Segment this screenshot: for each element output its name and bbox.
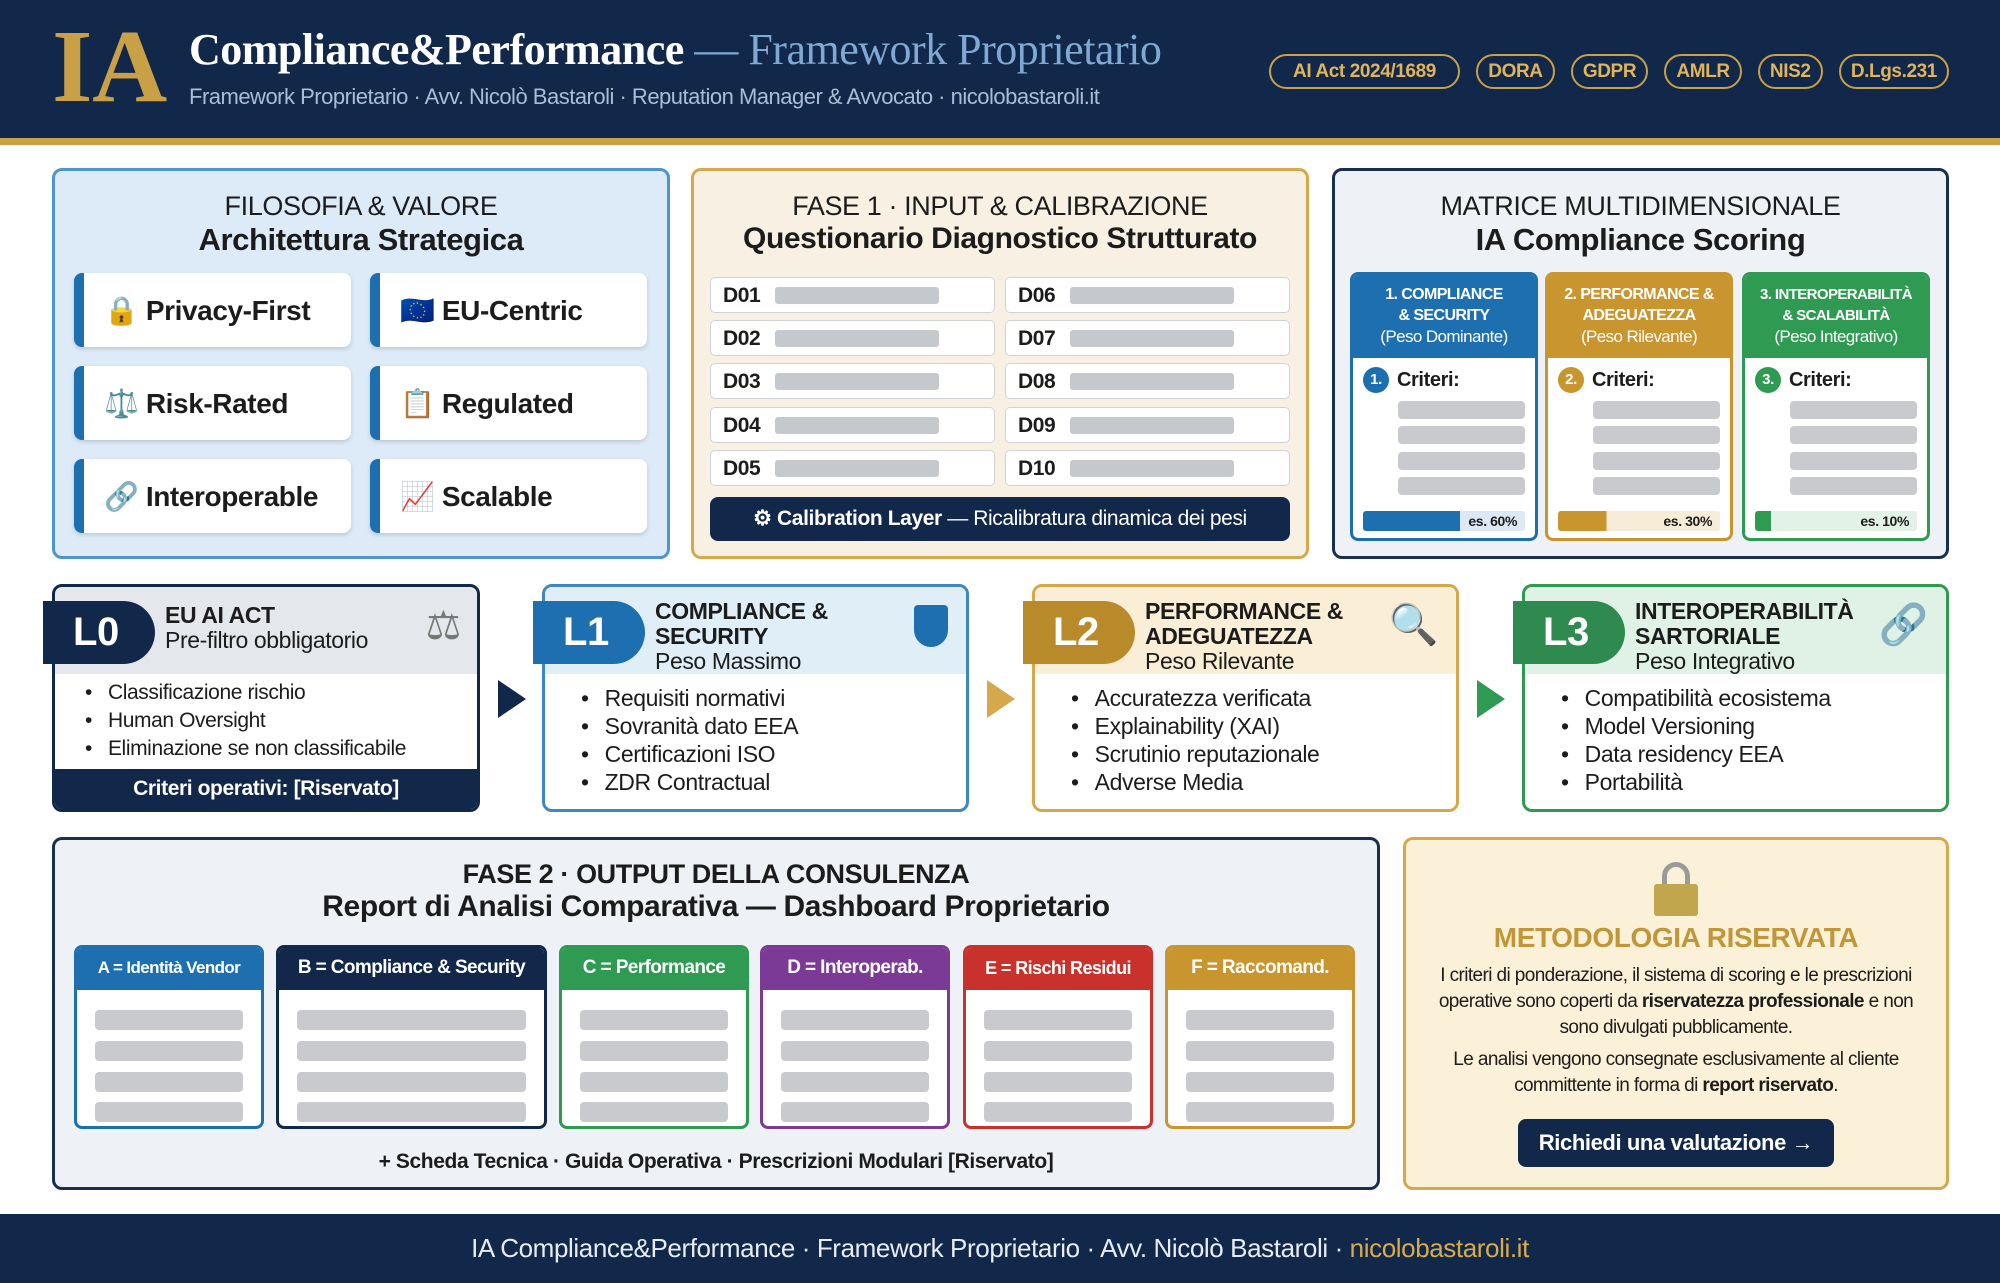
footnote: + Scheda Tecnica · Guida Operativa · Prescrizioni Modulari [Riservato] [379, 1150, 1053, 1173]
score column 3: & SCALABILITÀ [1782, 307, 1890, 324]
panel: fase 2 output [52, 837, 1380, 1190]
footer: IA Compliance&Performance · Framework Proprietario · Avv. Nicolò Bastaroli · nicolobastaroli.it [471, 1233, 1529, 1263]
domain rows D01-D10: D09 [1018, 414, 1055, 437]
output column B: B = Compliance & Security [298, 957, 525, 978]
L1 card: Peso Massimo [655, 648, 801, 674]
heading: Architettura Strategica [198, 222, 524, 257]
L0 card: Criteri operativi: [Riservato] [133, 777, 399, 800]
domain rows D01-D10: D03 [723, 370, 760, 393]
score column 1: Criteri: [1397, 368, 1459, 390]
L1 card [542, 584, 969, 812]
heading: FASE 1 · INPUT & CALIBRAZIONE [792, 191, 1208, 221]
score column 2: 2. [1565, 371, 1577, 388]
L3 card: Model Versioning [1585, 713, 1755, 739]
L1 card: SECURITY [655, 623, 768, 649]
main title: Compliance&Performance — Framework Proprietario [189, 25, 1161, 74]
score column 2: Criteri: [1592, 368, 1654, 390]
heading: FILOSOFIA & VALORE [225, 191, 497, 221]
regulation badges: DORA [1488, 61, 1543, 82]
button: Richiedi una valutazione → [1539, 1130, 1813, 1155]
score column 1: (Peso Dominante) [1380, 327, 1508, 346]
L0 card: Pre-filtro obbligatorio [165, 627, 368, 653]
score column 1: es. 60% [1468, 513, 1517, 529]
score column 1: & SECURITY [1399, 307, 1489, 324]
L0 card: Human Oversight [108, 709, 265, 732]
output column B [276, 945, 547, 1129]
output column F: F = Raccomand. [1191, 957, 1329, 978]
calibration layer bar [710, 497, 1290, 541]
heading [322, 859, 1110, 923]
score column 3 [1742, 272, 1930, 541]
panel: filosofia & valore [52, 168, 670, 559]
score column 2: ADEGUATEZZA [1582, 307, 1696, 324]
footer [0, 1214, 2000, 1283]
score column 2: 2. PERFORMANCE & [1564, 286, 1714, 303]
output column E: E = Rischi Residui [985, 958, 1131, 978]
regulation badges: D.Lgs.231 [1851, 61, 1937, 82]
L3 card: L3 [1543, 610, 1589, 654]
heading: FASE 2 · OUTPUT DELLA CONSULENZA [463, 859, 969, 889]
output column E [963, 945, 1153, 1129]
score column 1: 1. COMPLIANCE [1385, 286, 1503, 303]
value cards: 🔗 Interoperable [104, 480, 318, 512]
L2 card [1032, 584, 1459, 812]
L1 card: L1 [563, 610, 609, 654]
L1 card: Requisiti normativi [605, 685, 785, 711]
score column 1 [1350, 272, 1538, 541]
L3 card: Peso Integrativo [1635, 648, 1795, 674]
L1 card: COMPLIANCE & [655, 598, 828, 624]
button [1518, 1119, 1834, 1167]
score column 2: (Peso Rilevante) [1581, 327, 1697, 346]
arrow [987, 680, 1015, 718]
L1 card: ZDR Contractual [605, 769, 770, 795]
panel: matrice multidimensionale [1332, 168, 1949, 559]
header band [0, 0, 2000, 138]
calibration layer bar: ⚙ Calibration Layer — Ricalibratura dinamica dei pesi [753, 507, 1247, 530]
L2 card: Peso Rilevante [1145, 648, 1294, 674]
score column 3: Criteri: [1789, 368, 1851, 390]
L0 card: ⚖ [426, 604, 461, 648]
L1 card: Certificazioni ISO [605, 741, 775, 767]
domain rows D01-D10: D02 [723, 327, 760, 350]
L2 card: Explainability (XAI) [1095, 713, 1280, 739]
L3 card: Data residency EEA [1585, 741, 1783, 767]
regulation badges: AMLR [1676, 61, 1730, 82]
score column 2 [1545, 272, 1733, 541]
L3 card: 🔗 [1879, 603, 1928, 647]
output column C [559, 945, 749, 1129]
domain rows D01-D10: D01 [723, 284, 760, 307]
L3 card: Compatibilità ecosistema [1585, 685, 1831, 711]
domain rows D01-D10: D06 [1018, 284, 1055, 307]
L2 card: Scrutinio reputazionale [1095, 741, 1319, 767]
L2 card: PERFORMANCE & [1145, 598, 1343, 624]
domain rows D01-D10: D04 [723, 414, 760, 437]
panel: fase 1 questionario [691, 168, 1309, 559]
arrow [498, 680, 526, 718]
L0 card: Classificazione rischio [108, 681, 305, 704]
output column F [1165, 945, 1355, 1129]
value cards: 🔒 Privacy-First [104, 294, 310, 326]
L3 card: Portabilità [1585, 769, 1683, 795]
output column D [760, 945, 950, 1129]
L0 card: EU AI ACT [165, 602, 275, 628]
value cards: ⚖️ Risk-Rated [104, 388, 288, 418]
output column C: C = Performance [583, 957, 725, 978]
domain rows D01-D10: D05 [723, 457, 760, 480]
heading [1440, 191, 1841, 257]
L3 card: SARTORIALE [1635, 623, 1780, 649]
body text: I criteri di ponderazione, il sistema di scoring e le prescrizioni operative sono coperti da riservatezza professionale e non sono divulgati pubblicamente. Le analisi vengono consegnate esclusivamente al cliente committente in forma di report riservato. [1439, 965, 1913, 1096]
L3 card [1522, 584, 1949, 812]
score column 3: 3. INTEROPERABILITÀ [1760, 286, 1912, 303]
L2 card: Adverse Media [1095, 769, 1243, 795]
heading: Questionario Diagnostico Strutturato [743, 222, 1257, 255]
heading: MATRICE MULTIDIMENSIONALE [1440, 191, 1841, 221]
L0 card: L0 [73, 610, 119, 654]
value cards: 📈 Scalable [400, 480, 552, 512]
panel: metodologia riservata [1403, 837, 1949, 1190]
output column D: D = Interoperab. [787, 957, 923, 978]
domain rows D01-D10: D08 [1018, 370, 1055, 393]
heading: Report di Analisi Comparativa — Dashboard Proprietario [322, 890, 1110, 923]
value cards: 🇪🇺 EU-Centric [400, 294, 583, 326]
domain rows D01-D10: D07 [1018, 327, 1055, 350]
L0 card [52, 584, 480, 812]
regulation badges: GDPR [1583, 61, 1636, 82]
L3 card: INTEROPERABILITÀ [1635, 598, 1854, 624]
L0 card: Eliminazione se non classificabile [108, 737, 406, 760]
L2 card: Accuratezza verificata [1095, 685, 1311, 711]
heading: IA Compliance Scoring [1476, 222, 1805, 257]
output column A [74, 945, 264, 1129]
arrow [1477, 680, 1505, 718]
regulation badges: AI Act 2024/1689 [1293, 61, 1436, 82]
value cards [72, 273, 648, 536]
L2 card: L2 [1053, 610, 1099, 654]
score column 1: 1. [1370, 371, 1382, 388]
domain rows D01-D10 [710, 277, 1290, 486]
L1 card: Sovranità dato EEA [605, 713, 798, 739]
regulation badges [1269, 54, 1949, 89]
score column 3: 3. [1762, 371, 1774, 388]
logo IA: IA [52, 9, 167, 124]
subtitle: Framework Proprietario · Avv. Nicolò Bastaroli · Reputation Manager & Avvocato · nicolobastaroli.it [189, 84, 1099, 109]
icon: padlock [1654, 862, 1698, 916]
L2 card: 🔍 [1389, 603, 1438, 647]
regulation badges: NIS2 [1770, 61, 1811, 82]
L2 card: ADEGUATEZZA [1145, 623, 1313, 649]
heading: METODOLOGIA RISERVATA [1494, 922, 1858, 953]
value cards: 📋 Regulated [400, 388, 574, 418]
score column 3: es. 10% [1860, 513, 1909, 529]
score column 3: (Peso Integrativo) [1774, 327, 1898, 346]
domain rows D01-D10: D10 [1018, 457, 1055, 480]
heading [743, 191, 1257, 255]
score column 2: es. 30% [1663, 513, 1712, 529]
heading [198, 191, 524, 257]
output column A: A = Identità Vendor [98, 958, 240, 977]
